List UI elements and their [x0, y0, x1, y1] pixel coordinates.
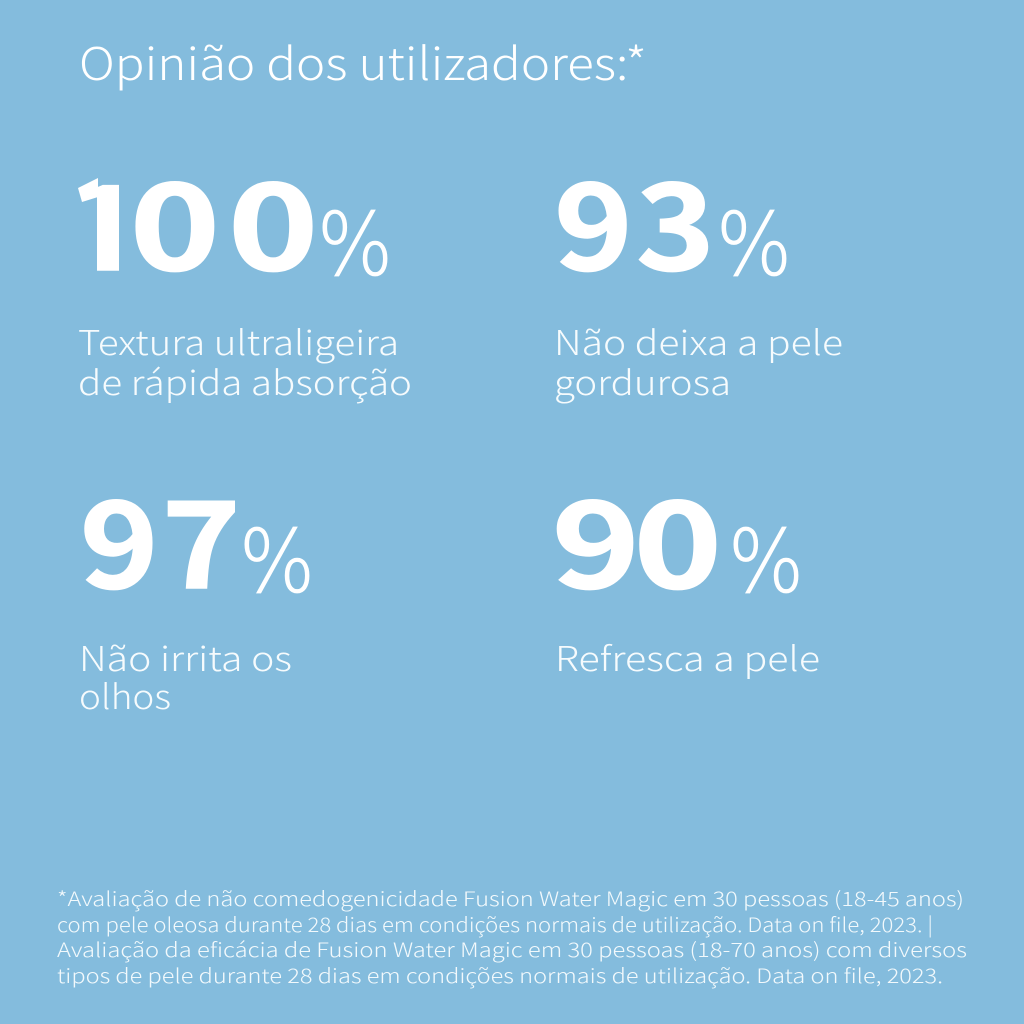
number: 90: 90 [552, 452, 722, 622]
number: 100, digit 1: 1 [60, 135, 151, 304]
percent sign: % [239, 511, 315, 613]
stat: 90% [552, 452, 820, 681]
footnote [57, 883, 967, 989]
label: line 1: Não deixa a pele [554, 316, 843, 365]
percent sign: % [728, 511, 804, 613]
footnote: com pele oleosa durante 28 dias em condições normais de utilização. Data on file, 2023. | [57, 909, 933, 938]
percent sign: % [716, 194, 792, 296]
number: 100, digits 00: 00 [130, 135, 318, 304]
label: Refresca a pele [555, 632, 820, 681]
title: Opinião dos utilizadores:* [79, 28, 647, 93]
stat: 97% [79, 453, 315, 719]
stat: 93% [554, 135, 843, 405]
stat: 100% [78, 178, 410, 404]
label: line 1: Textura ultraligeira [78, 316, 399, 365]
label: line 2: de rápida absorção [78, 356, 412, 405]
percent sign: % [317, 194, 393, 296]
label: line 2: gordurosa [554, 356, 731, 405]
footnote: *Avaliação de não comedogenicidade Fusion Water Magic em 30 pessoas (18-45 anos) [57, 883, 964, 912]
footnote: Avaliação da eficácia de Fusion Water Magic em 30 pessoas (18-70 anos) com diversos [57, 934, 967, 963]
footnote: tipos de pele durante 28 dias em condições normais de utilização. Data on file, 2023. [57, 960, 943, 989]
number: 97: 97 [80, 453, 241, 623]
label: line 2: olhos [79, 670, 171, 719]
label: line 1: Não irrita os [79, 632, 292, 681]
flag of the digit 1 [78, 178, 98, 202]
number: 93: 93 [554, 135, 715, 305]
